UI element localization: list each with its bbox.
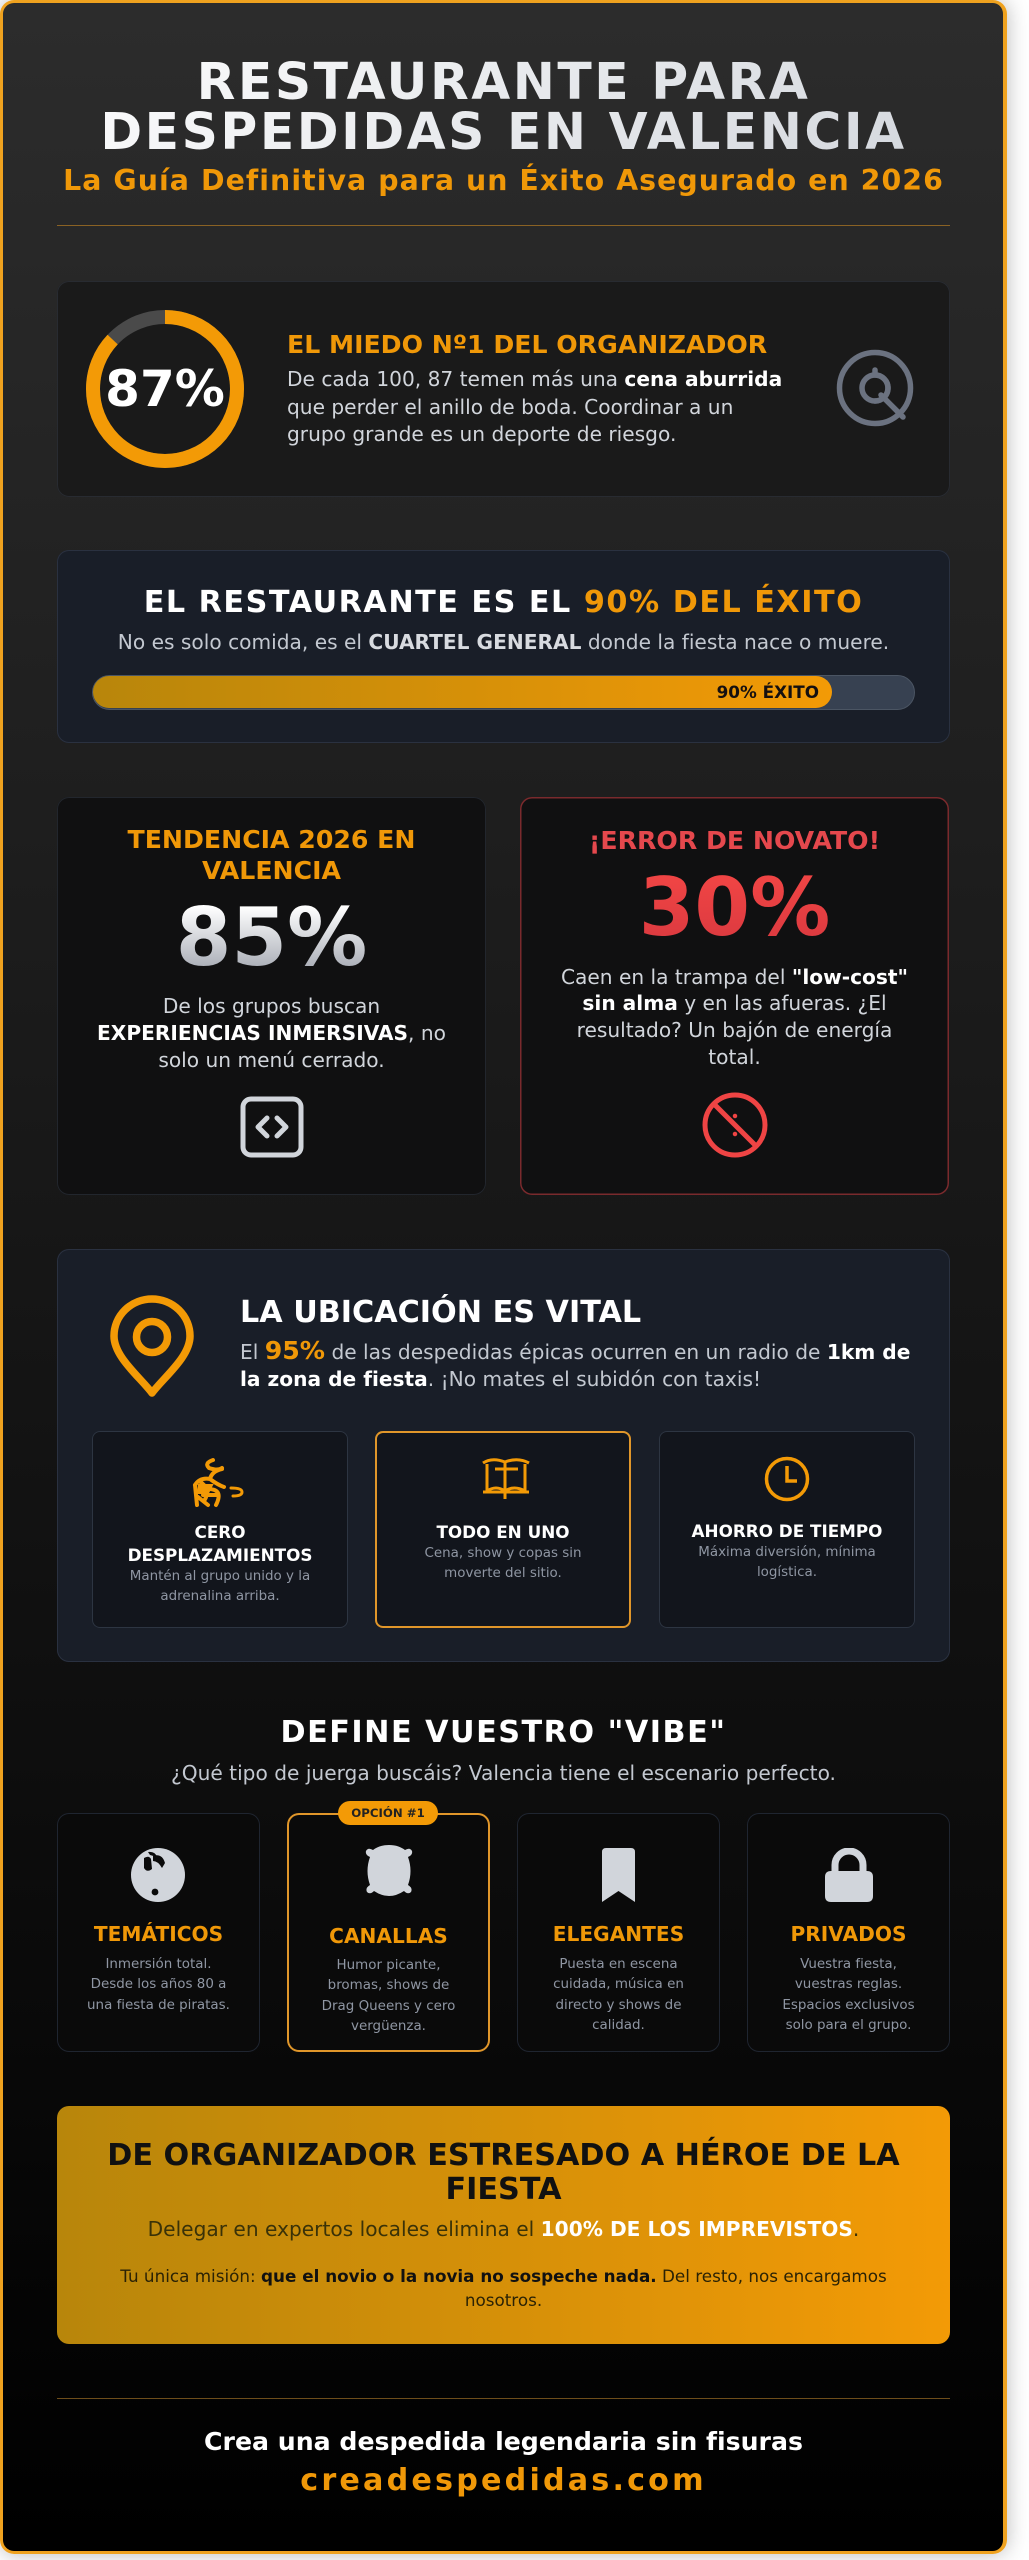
text: cuartel general: No es solo comida, es el CUARTEL GENERAL donde la fiesta nace o muere. [118,630,889,654]
text: única misión: Tu única misión: que el novio o la novia no sospeche nada. Del resto, nos encargamos [120,2266,887,2286]
heading: héroe: DE ORGANIZADOR ESTRESADO A HÉROE DE LA [107,2138,900,2173]
title: elegantes: ELEGANTES [553,1922,684,1946]
text: canallas: vergüenza. [351,2019,426,2034]
text: tendencia: solo un menú cerrado. [158,1048,385,1072]
title: todo en uno: TODO EN UNO [436,1522,570,1542]
text: temáticos: Inmersión total. [105,1957,212,1972]
title: RESTAURANTE PARA [197,52,810,111]
text: elegantes: Puesta en escena [559,1957,678,1972]
card: privados [747,1813,950,2052]
text: privados: Vuestra fiesta, [800,1957,897,1972]
panel: miedo del organizador [57,281,950,497]
text: elegantes [553,1957,684,2033]
text: todo en uno: moverte del sitio. [444,1566,562,1581]
text: ahorro de tiempo: logística. [757,1565,817,1580]
text: todo en uno [424,1546,582,1581]
icon: globe [131,1848,185,1902]
text: error: Caen en la trampa del "low-cost" [561,965,908,989]
heading: tendencia: VALENCIA [202,856,341,884]
icon: prohibited [702,1092,768,1158]
icon: squiggle [192,1458,244,1508]
text: tendencia: De los grupos buscan [163,994,380,1018]
text: privados: Espacios exclusivos [782,1998,915,2013]
text: cero desplazamientos: Mantén al grupo unido y la [130,1569,310,1584]
heading: héroe: FIESTA [445,2172,562,2207]
text: error: sin alma y en las afueras. ¿El [582,991,887,1015]
text: miedo: De cada 100, 87 temen más una cena aburrida [287,367,782,391]
heading: ubicación: LA UBICACIÓN ES VITAL [240,1295,641,1330]
text: temáticos [87,1957,230,2013]
footer url: creadespedidas.com [300,2463,707,2498]
text: temáticos: Desde los años 80 a [91,1977,226,1992]
text: elegantes: directo y shows de [556,1998,681,2013]
text: ahorro de tiempo: Máxima diversión, mínima [698,1545,876,1560]
text: elegantes: cuidada, música en [553,1977,684,1992]
text: miedo: que perder el anillo de boda. Coordinar a un [287,395,733,419]
title: cero desplazamientos: CERO [195,1522,245,1542]
icon: lock [825,1848,873,1902]
card: todo en uno [375,1431,631,1628]
text: error: total. [708,1045,761,1069]
card: cero desplazamientos [92,1431,348,1628]
panel: restaurante 90% [57,550,950,743]
title: temáticos: TEMÁTICOS [94,1922,223,1946]
heading: error: ¡ERROR DE NOVATO! [589,826,880,855]
card: temáticos [57,1813,260,2052]
title: cero desplazamientos: DESPLAZAMIENTOS [128,1544,312,1564]
panel: error de novato [520,797,949,1195]
card: elegantes [517,1813,720,2052]
footer tagline: Crea una despedida legendaria sin fisuras [204,2427,803,2456]
icon: bookmark [602,1848,635,1902]
badge: opción #1 [338,1801,438,1825]
progress fill [93,676,832,708]
stat 30%: 30% [639,861,830,954]
icon: code box [240,1096,304,1158]
donut chart 87% [86,310,244,468]
text: cero desplazamientos [130,1569,310,1604]
title: privados: PRIVADOS [790,1922,906,1946]
title: canallas: CANALLAS [329,1924,448,1948]
text: tendencia: EXPERIENCIAS INMERSIVAS, no [97,1020,446,1044]
text: todo en uno: Cena, show y copas sin [424,1546,582,1561]
title: ahorro de tiempo: AHORRO DE TIEMPO [692,1521,882,1541]
text: error: resultado? Un bajón de energía [577,1018,892,1042]
text: temáticos: una fiesta de piratas. [87,1998,230,2013]
card: ahorro de tiempo [659,1431,915,1628]
text: miedo [287,367,782,446]
heading: miedo: EL MIEDO Nº1 DEL ORGANIZADOR [287,330,767,359]
text: canallas: bromas, shows de [328,1978,449,1993]
title: DESPEDIDAS EN VALENCIA [100,102,907,161]
text: ahorro de tiempo [698,1545,876,1580]
heading: 90% del exito: EL RESTAURANTE ES EL 90% DEL ÉXITO [144,584,863,620]
text: tendencia [97,994,446,1072]
title: cero desplazamientos [128,1522,312,1564]
icon: book [482,1458,530,1499]
text: canallas: Humor picante, [337,1958,440,1973]
text: ubicación: la zona de fiesta. ¡No mates el subidón con taxis! [240,1366,761,1390]
card: canallas [287,1813,490,2052]
panel: héroe de la fiesta CTA [57,2106,950,2344]
text: canallas: Drag Queens y cero [322,1999,455,2014]
progress fill: 90% ÉXITO [717,682,819,702]
text: cero desplazamientos: adrenalina arriba. [160,1589,280,1604]
subtitle: La Guía Definitiva para un Éxito Asegurado en 2026 [63,164,944,197]
text: ubicación: El 95% de las despedidas épicas ocurren en un radio de 1km de [240,1336,910,1364]
panel: ubicación [57,1249,950,1662]
panel: tendencia 2026 [57,797,486,1195]
text: privados: vuestras reglas. [795,1977,902,1992]
subheading: vibe: ¿Qué tipo de juerga buscáis? Valencia tiene el escenario perfecto. [171,1761,836,1785]
icon: shield blob [366,1845,412,1896]
heading: héroe [107,2136,900,2207]
stat 30% [520,863,949,953]
stat 85%: 85% [176,891,367,984]
text: elegantes: calidad. [592,2018,645,2033]
text: única misión [120,2266,887,2310]
text: privados: solo para el grupo. [786,2018,911,2033]
text: miedo: grupo grande es un deporte de riesgo. [287,422,676,446]
icon: clock [764,1456,810,1502]
text: única misión: nosotros. [465,2290,542,2310]
text: error [561,965,908,1069]
heading: tendencia: TENDENCIA 2026 EN [128,824,415,854]
title [0,57,1007,157]
badge: opción #1: OPCIÓN #1 [351,1806,425,1820]
text: ubicación [240,1336,910,1390]
stat 85% [57,893,486,983]
text: delegar: Delegar en expertos locales elimina el 100% DE LOS IMPREVISTOS. [148,2217,859,2241]
icon: compass [836,350,914,426]
text: privados [782,1957,915,2033]
donut chart 87%: 87% [105,360,225,418]
text: canallas [322,1958,455,2034]
progress bar 90% [92,675,915,710]
heading: tendencia [128,824,415,884]
icon: location pin [110,1295,194,1397]
heading: define vuestro vibe: DEFINE VUESTRO "VIBE" [280,1715,726,1750]
